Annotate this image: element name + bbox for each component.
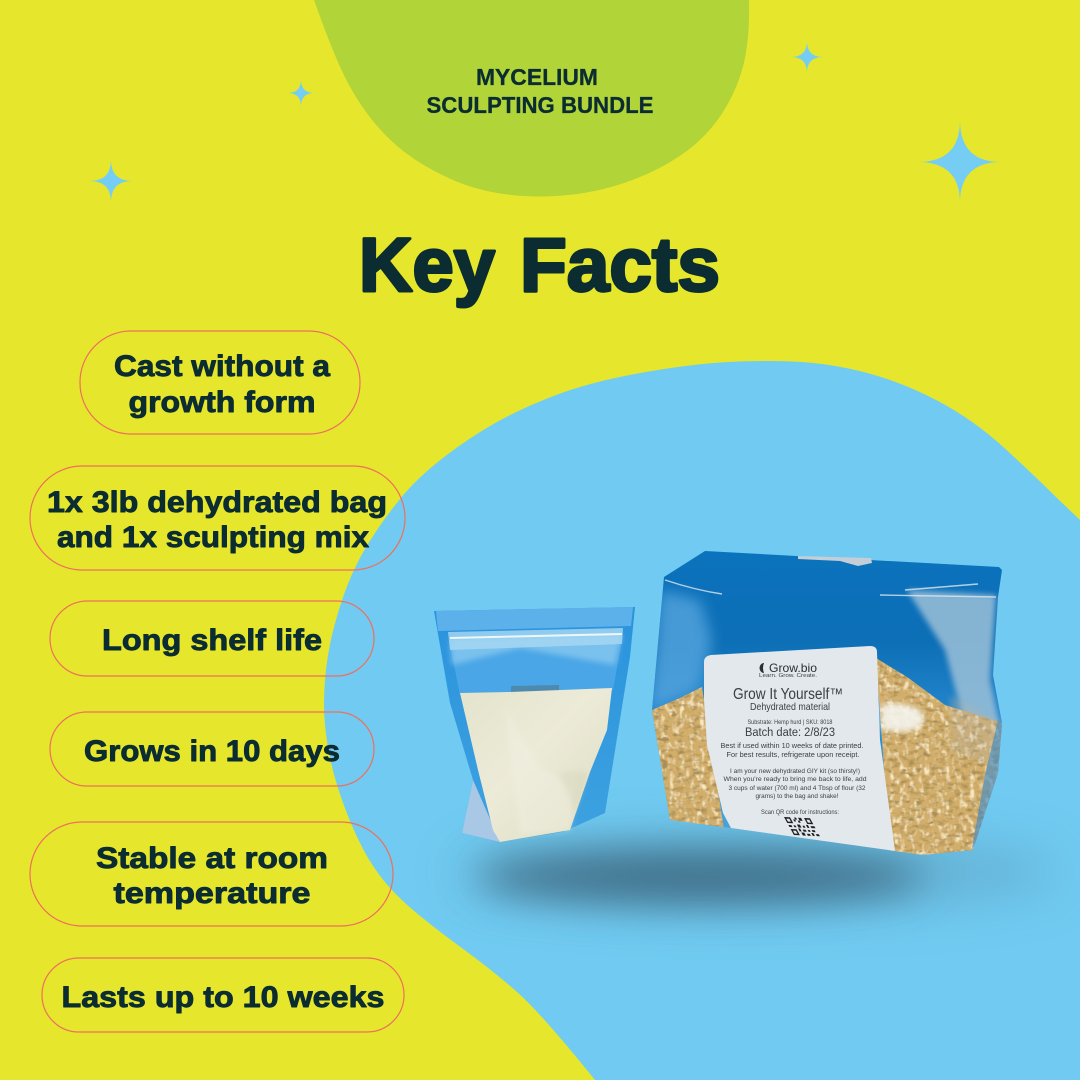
label text: grams) to the bag and shake! [756,793,839,800]
label [704,646,895,851]
pill: long shelf life [50,601,374,676]
shadow under products [460,842,1060,903]
icon: sparkle top right [791,41,823,73]
pill: lasts up to 10 weeks [42,958,404,1032]
title: Key [359,223,495,308]
powder [460,688,612,842]
silver seal strip [798,556,872,566]
title: Facts [520,223,720,308]
label text: Grow.bio [769,661,817,675]
pill: stable at room temperature: Stable at room [96,842,328,875]
crease highlights [665,580,996,597]
pill: bag contents: and 1x sculpting mix [57,521,369,554]
label text: For best results, refrigerate upon receipt. [726,750,860,759]
pill: bag contents: 1x 3lb dehydrated bag [47,486,387,519]
clear film left [650,590,712,712]
right blue edge [972,720,1003,848]
label text: Grow It Yourself™ [733,686,843,703]
title [359,223,720,308]
product: sculpting mix pouch [434,607,635,842]
label text: I am your new dehydrated GIY kit (so thirsty!) [730,768,860,775]
QR code [784,817,820,836]
pill: grows in 10 days [50,712,374,786]
hemp chips right [876,658,1002,856]
hemp chips left [652,687,724,830]
label text: Substrate: Hemp hurd | SKU: 8018 [748,719,833,726]
label text [720,661,867,816]
label text: 3 cups of water (700 ml) and 4 Tbsp of flour (32 [728,785,866,792]
pill: long shelf life: Long shelf life [102,624,322,657]
clear film upper right [907,590,1002,735]
icon: sparkle small [287,79,315,107]
lower left film [462,780,500,842]
pill: cast without a growth form: growth form [128,386,316,419]
pill: lasts up to 10 weeks: Lasts up to 10 weeks [62,981,384,1014]
icon: sparkle left [89,159,133,203]
label text: Best if used within 10 weeks of date printed. [720,741,864,750]
label text: Scan QR code for instructions: [761,810,839,816]
subtitle: MYCELIUM [476,64,598,90]
label text: Learn. Grow. Create. [759,673,818,679]
product: dehydrated bag [650,551,1003,856]
icon: sparkle large [918,120,1001,203]
pill: grows in 10 days: Grows in 10 days [84,735,340,768]
pill: cast without a growth form [80,331,360,434]
film over chips [950,695,1000,765]
pill: bag contents [30,466,405,570]
pill: stable at room temperature [30,822,393,926]
mycelium patch [880,704,924,732]
pill: stable at room temperature: temperature [114,877,310,910]
subtitle: SCULPTING BUNDLE [426,92,654,118]
clear window [449,634,623,695]
label text: Batch date: 2/8/23 [745,727,835,739]
blue blob [324,361,1080,1080]
pill: cast without a growth form: Cast without a [114,350,330,383]
label text: When you're ready to bring me back to life, add [724,776,867,783]
label text: Dehydrated material [750,701,830,713]
green blob [314,0,749,196]
subtitle [426,64,654,118]
